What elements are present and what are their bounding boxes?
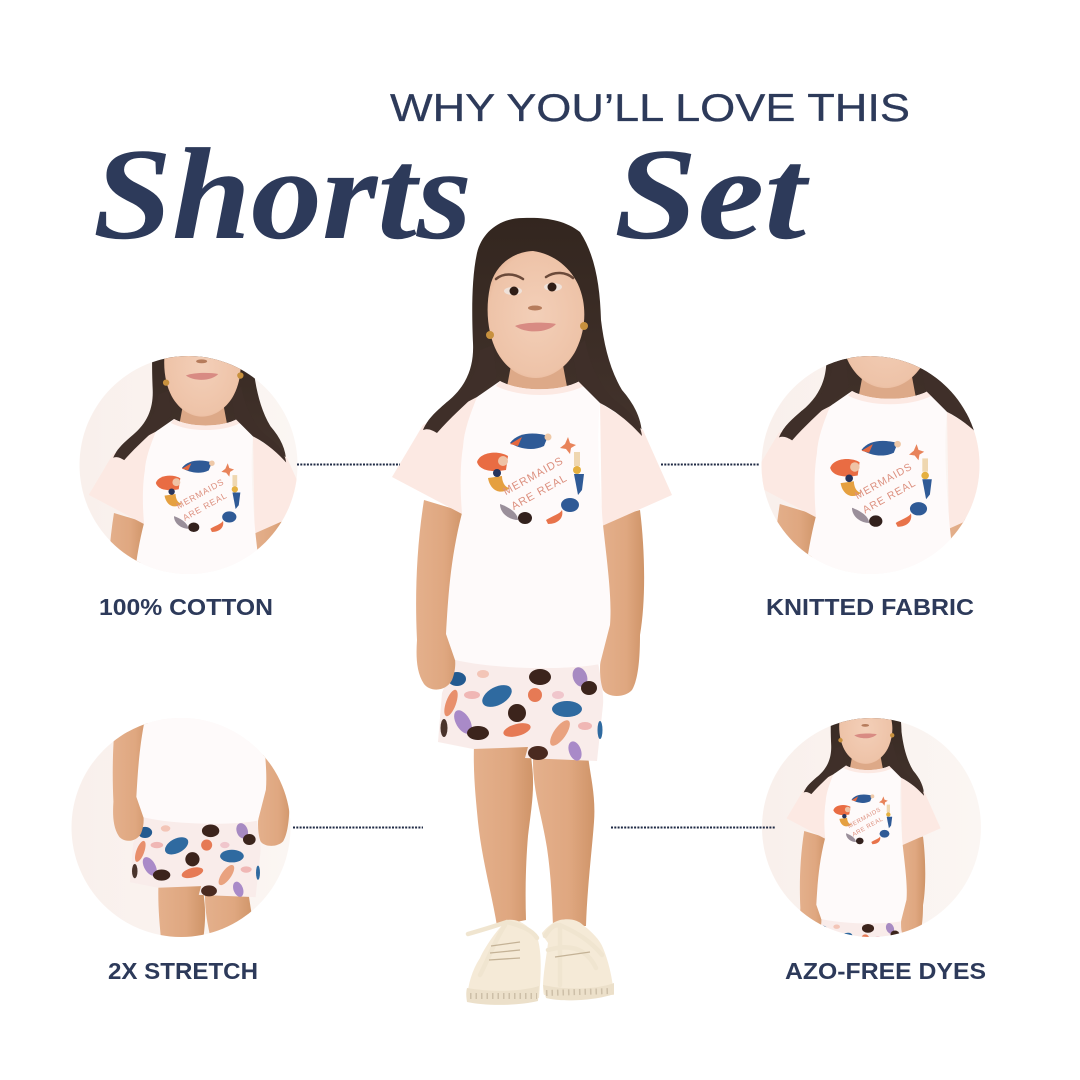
title: Shorts Set: Set (614, 122, 810, 267)
title: Shorts Set (93, 122, 810, 267)
t-shirt (392, 381, 672, 668)
circle 3 backdrop (72, 718, 290, 937)
label: azo-free dyes: AZO-FREE DYES (785, 958, 986, 984)
connector: knitted fabric (661, 464, 760, 466)
subtitle: why you'll love this: WHY YOU’LL LOVE THIS (390, 87, 910, 130)
connector: azo-free dyes (611, 826, 776, 828)
arms (416, 500, 644, 696)
mouth (515, 323, 556, 331)
eyes (504, 287, 522, 295)
circle 4 backdrop (762, 718, 981, 937)
t-shirt print: mermaids are real: MERMAIDS (501, 455, 566, 498)
shorts (438, 656, 603, 762)
eyebrows (496, 273, 573, 279)
label: knitted fabric: KNITTED FABRIC (766, 594, 974, 620)
connector: 2x stretch (293, 826, 423, 828)
nose (528, 306, 542, 310)
label: 2x stretch: 2X STRETCH (108, 958, 258, 984)
connector: 100% cotton (297, 464, 400, 466)
main figure: girl in mermaid tee and shorts (392, 218, 672, 1005)
face (486, 251, 588, 378)
shoes (466, 919, 614, 1005)
circle 3 crop: shorts close up (112, 718, 290, 937)
circle 2 crop: tee fabric close up (762, 356, 980, 574)
shorts print: mermaids (440, 665, 602, 762)
legs (474, 745, 594, 926)
hair back (423, 218, 642, 436)
hair strands over shoulders (423, 340, 642, 436)
circle 1 crop: tee upper body (89, 356, 296, 574)
t-shirt print: mermaids are real (477, 434, 584, 524)
t-shirt print: mermaids are real: ARE REAL (509, 472, 570, 513)
circle 1 backdrop (80, 356, 298, 574)
neck (506, 360, 568, 392)
title: Shorts Set: Shorts (93, 122, 472, 267)
label: 100% cotton: 100% COTTON (99, 594, 273, 620)
circle 4 crop: full tee view (787, 718, 940, 937)
circle 2 backdrop (762, 356, 980, 574)
earrings (580, 322, 588, 330)
